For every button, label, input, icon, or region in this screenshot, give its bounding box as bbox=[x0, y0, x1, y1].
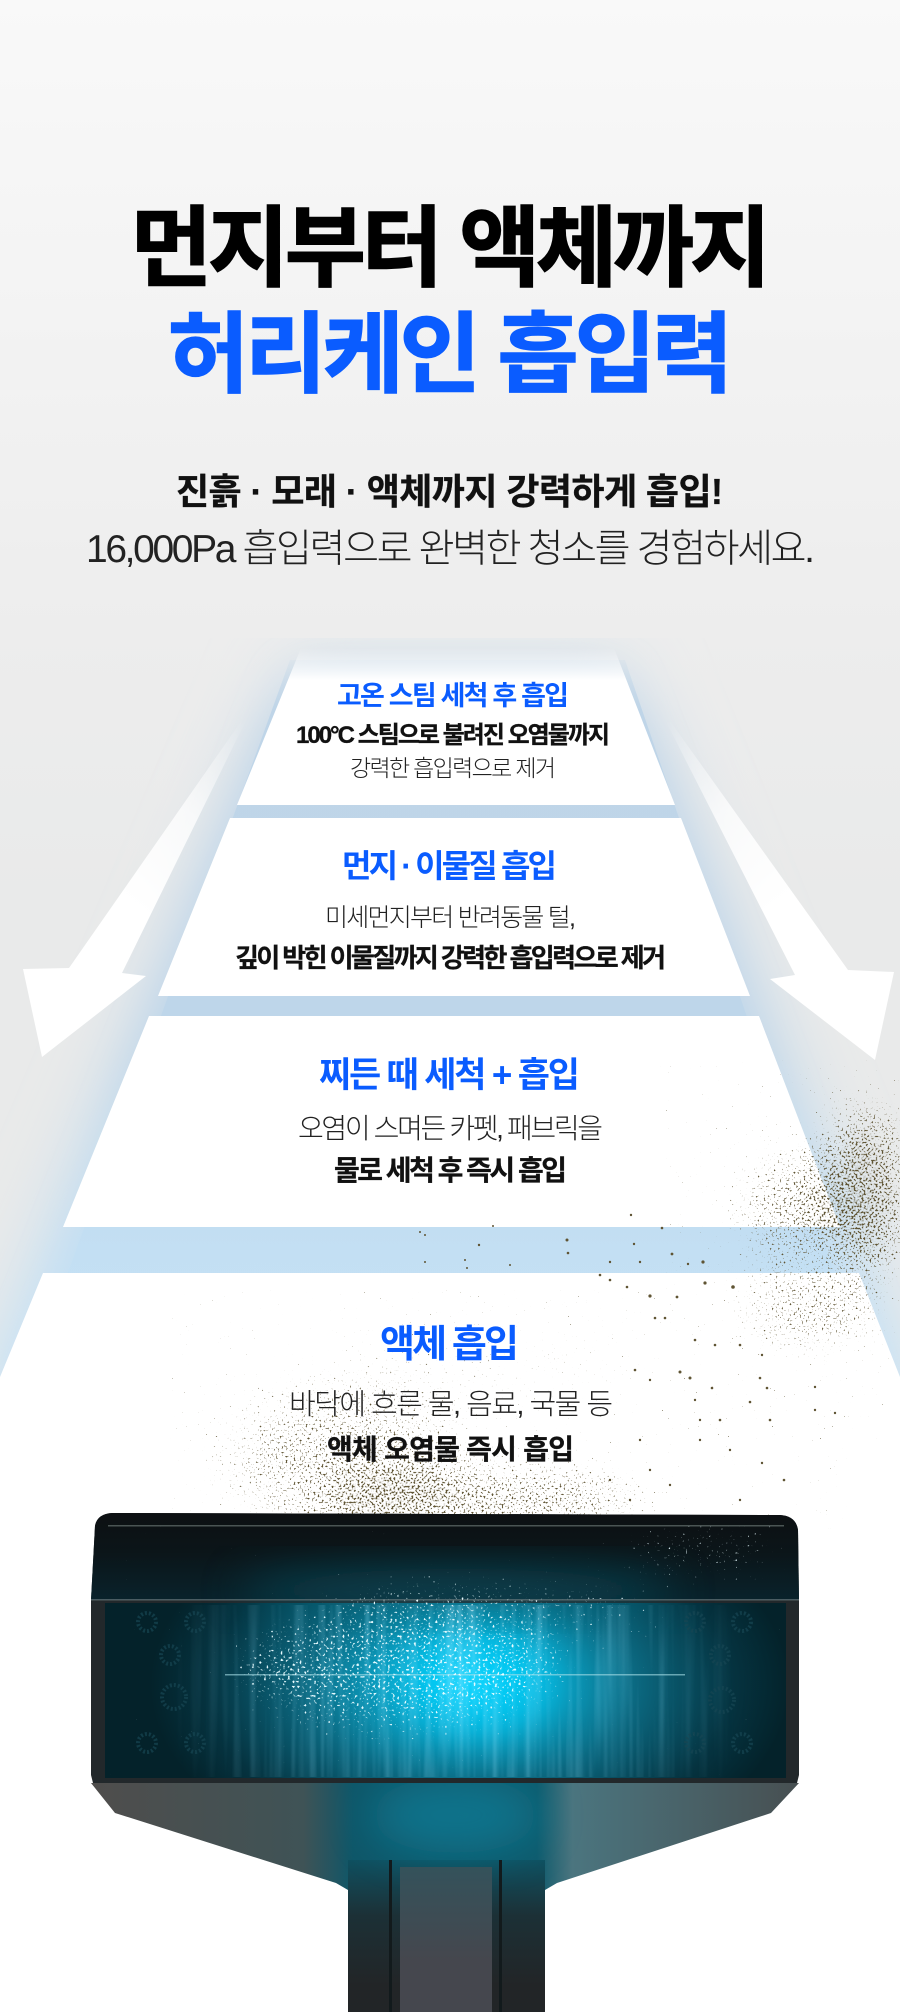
panel text: liquid bbox=[289, 1324, 613, 1465]
panel text: dust: 미세먼지부터 반려동물 털, bbox=[325, 904, 576, 932]
nozzle lid bbox=[91, 1513, 799, 1600]
shaft grooves bbox=[389, 1860, 502, 2012]
panel text: liquid: 바닥에 흐른 물, 음료, 국물 등 bbox=[289, 1389, 613, 1421]
background gradient bbox=[0, 0, 900, 900]
window streaks bbox=[194, 1605, 721, 1777]
panel text: liquid: 액체 흡입 bbox=[380, 1324, 519, 1366]
arrow: left suction bbox=[23, 700, 256, 1057]
panel text: stains: 물로 세척 후 즉시 흡입 bbox=[334, 1155, 567, 1186]
subtitle: 진흙 · 모래 · 액체까지 강력하게 흡입! bbox=[176, 471, 723, 512]
inner horizontal rib bbox=[225, 1674, 685, 1676]
subtitle bbox=[86, 471, 815, 571]
panel: liquid bbox=[0, 1273, 900, 1530]
panel text: dust: 깊이 박힌 이물질까지 강력한 흡입력으로 제거 bbox=[235, 943, 666, 973]
nozzle neck bbox=[91, 1783, 799, 1890]
blue funnel glow bbox=[0, 655, 900, 1420]
panel: dust bbox=[158, 818, 750, 996]
vacuum nozzle bbox=[91, 1513, 799, 2012]
panel text: stains: 찌든 때 세척 + 흡입 bbox=[319, 1056, 580, 1095]
white floor bbox=[0, 1510, 900, 2012]
arrow: right suction bbox=[655, 700, 894, 1060]
screws bbox=[138, 1613, 751, 1752]
panel text: steam: 강력한 흡입력으로 제거 bbox=[350, 755, 556, 781]
lid seam bbox=[91, 1599, 799, 1600]
title bbox=[131, 199, 771, 404]
background lower grey bbox=[0, 899, 900, 1539]
panel: steam bbox=[237, 648, 675, 805]
scattered dust particles bbox=[419, 1214, 836, 1501]
title: 먼지부터 액체까지 bbox=[131, 199, 771, 298]
panel text: liquid: 액체 오염물 즉시 흡입 bbox=[327, 1434, 574, 1465]
nozzle centre glow bbox=[370, 1777, 540, 1853]
shaft centre panel bbox=[400, 1867, 492, 2012]
panel text: dust: 먼지 · 이물질 흡입 bbox=[342, 848, 557, 884]
panel: stains bbox=[63, 1016, 840, 1227]
dust cloud: right bbox=[660, 1060, 900, 1440]
title: 허리케인 흡입력 bbox=[168, 305, 733, 404]
window bbox=[105, 1603, 786, 1778]
water sparkles bbox=[126, 1526, 784, 1775]
subtitle: 16,000Pa 흡입력으로 완벽한 청소를 경험하세요. bbox=[86, 528, 815, 571]
window core glow bbox=[410, 1635, 550, 1725]
panel text: stains: 오염이 스며든 카펫, 패브릭을 bbox=[298, 1113, 603, 1144]
panel text: steam: 100°C 스팀으로 불려진 오염물까지 bbox=[296, 722, 610, 749]
panel text: steam bbox=[296, 681, 610, 781]
nozzle body bbox=[91, 1513, 799, 1783]
lid upper window glow bbox=[238, 1568, 678, 1612]
panel text: stains bbox=[298, 1056, 603, 1186]
nozzle shaft bbox=[348, 1860, 545, 2012]
dust cloud: centre bbox=[170, 1290, 850, 1530]
panel text: dust bbox=[235, 848, 666, 973]
panel text: steam: 고온 스팀 세척 후 흡입 bbox=[337, 681, 569, 711]
lid highlight strip bbox=[108, 1525, 784, 1526]
